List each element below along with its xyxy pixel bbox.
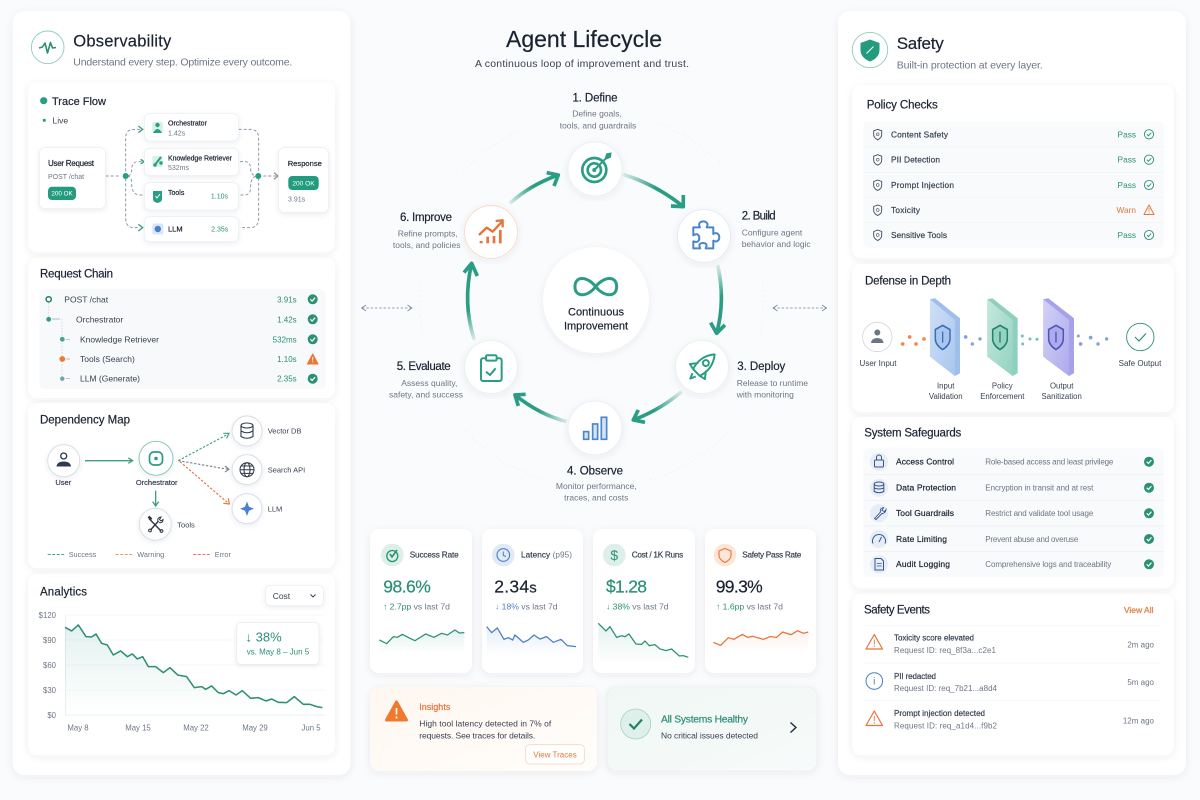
step 3: deploy bbox=[676, 340, 808, 400]
panel: dependency map bbox=[28, 403, 335, 568]
node: llm bbox=[232, 494, 282, 524]
panel: system safeguards bbox=[852, 417, 1174, 588]
arrow: left two-way bbox=[362, 305, 412, 311]
panel: analytics bbox=[28, 574, 335, 755]
node: safe output: Safe Output bbox=[1119, 359, 1162, 368]
row: prompt injection bbox=[874, 180, 1154, 190]
layer: input validation: Validation bbox=[929, 392, 963, 401]
legend bbox=[48, 550, 231, 559]
lifecycle diagram bbox=[389, 93, 811, 503]
panel: insights bbox=[370, 687, 597, 771]
step 2: build: behavior and logic bbox=[742, 239, 811, 249]
node: user input bbox=[860, 322, 897, 368]
row: audit logging: Audit Logging bbox=[896, 559, 950, 569]
node: user input: User Input bbox=[860, 359, 897, 368]
step 3: deploy: Release to runtime bbox=[737, 378, 808, 388]
kpi: latency: 2.34s bbox=[494, 577, 537, 597]
step 1: define: Define goals, bbox=[572, 109, 622, 119]
step 5: evaluate: safety, and success bbox=[389, 390, 463, 400]
layer: output sanitization bbox=[1042, 298, 1082, 401]
step 6: improve bbox=[393, 206, 518, 258]
heading: observability: Observability bbox=[73, 33, 172, 51]
node: response: 200 OK bbox=[292, 180, 315, 188]
dropdown: cost bbox=[266, 586, 323, 606]
row: tool guardrails: Restrict and validate tool usage bbox=[985, 509, 1094, 518]
legend: Error bbox=[215, 550, 231, 559]
kpi: success rate: ↑ 2.7pp vs last 7d bbox=[383, 602, 450, 612]
node: tools bbox=[144, 183, 239, 210]
kpi: cost per 1k runs: $ bbox=[610, 547, 618, 563]
icon: warning bbox=[386, 702, 406, 720]
heading: analytics: Analytics bbox=[40, 586, 87, 598]
kpi: cost per 1k runs: ↓ 38% vs last 7d bbox=[606, 602, 669, 612]
legend: Warning bbox=[137, 550, 164, 559]
node: orchestrator bbox=[136, 441, 178, 487]
row: access control bbox=[870, 453, 1154, 471]
line chart: cost: May 15 bbox=[125, 724, 151, 732]
node: user: User bbox=[55, 478, 72, 487]
node: llm: LLM bbox=[268, 504, 282, 513]
panel: safety bbox=[838, 11, 1186, 775]
row: post chat: 3.91s bbox=[277, 295, 297, 304]
step 3: deploy: 3. Deploy bbox=[737, 361, 786, 373]
line chart: cost: May 8 bbox=[67, 724, 89, 732]
row: tools search bbox=[59, 354, 318, 364]
event: pii redacted: i bbox=[873, 676, 875, 688]
heading: trace flow: Trace Flow bbox=[52, 96, 106, 108]
step 3: deploy: with monitoring bbox=[736, 390, 794, 400]
heading: safety events: Safety Events bbox=[864, 604, 930, 616]
kpi: success rate: Success Rate bbox=[410, 550, 459, 560]
step 6: improve: Refine prompts, bbox=[398, 229, 458, 239]
step 2: build: Configure agent bbox=[742, 227, 803, 237]
panel: all systems healthy: All Systems Healthy bbox=[661, 715, 749, 726]
trace arrows and nodes bbox=[123, 126, 278, 231]
layer: policy enforcement: Policy bbox=[992, 381, 1013, 390]
legend: Success bbox=[69, 550, 97, 559]
row: content safety bbox=[874, 129, 1154, 140]
subtitle: observability: Understand every step. Optimize every outcome. bbox=[73, 57, 292, 69]
node: response bbox=[279, 148, 328, 213]
node: response: Response bbox=[288, 159, 322, 168]
heading: safety: Safety bbox=[897, 34, 944, 53]
center hub: continuous improvement bbox=[543, 247, 649, 353]
event: prompt injection detected: Request ID: req_a1d4...f9b2 bbox=[894, 721, 998, 730]
row: content safety: Pass bbox=[1118, 129, 1136, 139]
node: knowledge retriever: 532ms bbox=[168, 165, 190, 172]
button: view traces bbox=[526, 745, 584, 764]
row: rate limiting: Prevent abuse and overuse bbox=[985, 535, 1079, 544]
event: pii redacted: 5m ago bbox=[1127, 678, 1155, 687]
icon: healthy check bbox=[621, 709, 651, 739]
live indicator bbox=[43, 115, 68, 125]
checks table bbox=[863, 122, 1164, 248]
node: safe output bbox=[1119, 323, 1162, 368]
panel: all systems healthy: No critical issues detected bbox=[661, 731, 758, 741]
chain table bbox=[39, 289, 326, 389]
step 4: observe: traces, and costs bbox=[564, 493, 628, 503]
event: prompt injection detected: Prompt injection detected bbox=[894, 709, 985, 718]
kpi: success rate: 98.6% bbox=[383, 577, 431, 597]
line chart: cost bbox=[39, 611, 325, 732]
heading: request chain: Request Chain bbox=[40, 269, 113, 281]
heading: dependency map: Dependency Map bbox=[40, 414, 130, 426]
icon: chevron bbox=[790, 722, 796, 732]
heading: policy checks: Policy Checks bbox=[867, 99, 938, 111]
layer: input validation: Input bbox=[937, 381, 955, 390]
line chart: cost: $60 bbox=[43, 661, 57, 670]
step 4: observe: Monitor performance, bbox=[556, 481, 637, 491]
node: user request: 200 OK bbox=[51, 191, 73, 198]
row: knowledge retriever: 532ms bbox=[273, 335, 297, 344]
layer: input validation bbox=[929, 298, 963, 401]
panel: trace flow bbox=[28, 82, 335, 252]
row: post chat bbox=[46, 294, 318, 304]
row: data protection bbox=[870, 479, 1154, 497]
event: toxicity score elevated: Request ID: req_8f3a...c2e1 bbox=[894, 646, 997, 655]
node: user bbox=[48, 445, 80, 487]
center hub: continuous improvement: Continuous bbox=[568, 307, 624, 319]
panel: policy checks bbox=[852, 85, 1174, 258]
row: tool guardrails bbox=[870, 504, 1154, 522]
layer dots bbox=[901, 334, 1108, 346]
panel: observability bbox=[12, 11, 350, 775]
heading: defense in depth: Defense in Depth bbox=[865, 276, 951, 288]
callout: 38 percent: ↓ 38% bbox=[246, 629, 282, 644]
row: data protection: Encryption in transit and at rest bbox=[985, 484, 1094, 493]
event: toxicity score elevated: Toxicity score elevated bbox=[894, 634, 974, 643]
step 2: build bbox=[678, 210, 811, 262]
row: post chat: POST /chat bbox=[64, 294, 109, 304]
step 1: define: 1. Define bbox=[572, 93, 618, 105]
row: rate limiting bbox=[870, 530, 1154, 548]
event: prompt injection detected: 12m ago bbox=[1123, 716, 1155, 725]
layer: policy enforcement bbox=[980, 298, 1025, 401]
cycle arrows bbox=[464, 173, 725, 422]
kpi: safety pass rate: 99.3% bbox=[716, 577, 763, 597]
row: sensitive tools: Pass bbox=[1118, 230, 1136, 240]
node: user request: POST /chat bbox=[48, 174, 84, 181]
live indicator: Live bbox=[52, 115, 68, 125]
row: knowledge retriever bbox=[60, 334, 318, 344]
title: Agent Lifecycle bbox=[506, 26, 662, 52]
row: access control: Role-based access and least privilege bbox=[985, 458, 1114, 467]
panel: request chain bbox=[28, 258, 335, 398]
node: tools: Tools bbox=[177, 520, 195, 530]
row: toxicity: Warn bbox=[1116, 205, 1136, 215]
row: llm generate: 2.35s bbox=[277, 375, 297, 384]
row: content safety: Content Safety bbox=[891, 129, 949, 139]
node: tools bbox=[139, 508, 195, 540]
row: prompt injection: Pass bbox=[1118, 180, 1136, 190]
node: orchestrator: 1.42s bbox=[168, 130, 186, 137]
line chart: cost: $0 bbox=[47, 711, 57, 720]
row: prompt injection: Prompt Injection bbox=[891, 180, 954, 190]
row: sensitive tools bbox=[874, 230, 1154, 240]
kpi: safety pass rate: Safety Pass Rate bbox=[742, 550, 802, 560]
panel: all systems healthy bbox=[607, 687, 817, 771]
step 1: define: tools, and guardrails bbox=[560, 121, 636, 131]
row: pii detection: PII Detection bbox=[891, 155, 940, 165]
node: search api bbox=[232, 455, 305, 485]
node: tools: 1.10s bbox=[211, 194, 228, 200]
line chart: cost: $30 bbox=[43, 686, 57, 695]
line chart: cost: May 29 bbox=[242, 724, 268, 732]
node: tools: Tools bbox=[168, 190, 185, 197]
row: pii detection: Pass bbox=[1118, 155, 1136, 165]
node: user request: User Request bbox=[48, 159, 95, 168]
row: toxicity: Toxicity bbox=[891, 205, 921, 215]
row: access control: Access Control bbox=[896, 457, 954, 467]
arrow: right two-way bbox=[773, 305, 826, 311]
icon: pulse bbox=[31, 31, 64, 64]
panel: insights: High tool latency detected in 7% of bbox=[419, 719, 552, 729]
subtitle: safety: Built-in protection at every layer. bbox=[897, 59, 1043, 71]
kpi: latency: Latency (p95) bbox=[521, 550, 572, 560]
event: toxicity score elevated: 2m ago bbox=[1127, 640, 1155, 649]
step 5: evaluate: Assess quality, bbox=[401, 378, 457, 388]
row: orchestrator: Orchestrator bbox=[76, 314, 123, 324]
subtitle: A continuous loop of improvement and trust. bbox=[475, 58, 689, 70]
step 2: build: 2. Build bbox=[742, 210, 776, 222]
trace connectors bbox=[106, 129, 277, 228]
kpi: latency bbox=[482, 529, 583, 673]
line chart: cost: May 22 bbox=[183, 724, 209, 732]
layer: output sanitization: Sanitization bbox=[1042, 392, 1082, 401]
line chart: cost: Jun 5 bbox=[301, 724, 321, 732]
safeguards table bbox=[863, 448, 1164, 577]
layer: output sanitization: Output bbox=[1050, 381, 1074, 390]
node: response: 3.91s bbox=[288, 197, 306, 204]
kpi: safety pass rate: ↑ 1.6pp vs last 7d bbox=[716, 602, 783, 612]
row: audit logging: Comprehensive logs and traceability bbox=[985, 560, 1111, 569]
node: llm bbox=[144, 217, 239, 242]
row: pii detection bbox=[874, 155, 1154, 165]
kpi: success rate bbox=[370, 529, 472, 673]
step 1: define bbox=[560, 93, 636, 196]
step 6: improve: 6. Improve bbox=[400, 212, 452, 224]
panel: insights: requests. See traces for details. bbox=[419, 730, 535, 740]
row: tools search: Tools (Search) bbox=[80, 354, 135, 364]
node: user request bbox=[39, 148, 106, 209]
decorative outer ring bbox=[419, 122, 764, 480]
row: llm generate: LLM (Generate) bbox=[80, 374, 140, 384]
row: tools search: 1.10s bbox=[277, 355, 297, 364]
node: llm: LLM bbox=[168, 224, 183, 234]
line chart: cost: $120 bbox=[39, 611, 57, 620]
node: orchestrator: Orchestrator bbox=[136, 478, 178, 487]
event: pii redacted bbox=[866, 672, 1155, 693]
step 4: observe: 4. Observe bbox=[567, 465, 623, 477]
event: prompt injection detected bbox=[866, 709, 1155, 730]
event: toxicity score elevated bbox=[866, 634, 1155, 655]
row: audit logging bbox=[870, 555, 1154, 573]
row: llm generate bbox=[60, 374, 318, 384]
kpi: cost per 1k runs: $1.28 bbox=[606, 577, 647, 597]
row: orchestrator bbox=[46, 314, 318, 324]
step 5: evaluate bbox=[389, 340, 518, 400]
button: view traces: View Traces bbox=[533, 750, 577, 760]
node: search api: Search API bbox=[268, 465, 305, 474]
event: pii redacted: Request ID: req_7b21...a8d4 bbox=[894, 684, 998, 693]
panel: insights: Insights bbox=[419, 702, 451, 712]
kpi: safety pass rate bbox=[705, 529, 816, 673]
kpi: cost per 1k runs: Cost / 1K Runs bbox=[632, 550, 683, 560]
callout: 38 percent: vs. May 8 – Jun 5 bbox=[247, 647, 310, 656]
kpi: cost per 1k runs bbox=[593, 529, 695, 673]
dependency arrows bbox=[85, 433, 229, 506]
center hub: continuous improvement: Improvement bbox=[564, 321, 628, 333]
icon: shield bbox=[852, 32, 888, 68]
layer: policy enforcement: Enforcement bbox=[980, 392, 1025, 401]
row: knowledge retriever: Knowledge Retriever bbox=[80, 334, 159, 344]
node: orchestrator bbox=[144, 114, 239, 141]
step 5: evaluate: 5. Evaluate bbox=[397, 361, 451, 373]
line chart: cost: $90 bbox=[43, 636, 57, 645]
dropdown: cost: Cost bbox=[273, 591, 291, 601]
row: toxicity bbox=[874, 205, 1154, 216]
row: rate limiting: Rate Limiting bbox=[896, 534, 947, 544]
event: pii redacted: PII redacted bbox=[894, 672, 936, 681]
row: orchestrator: 1.42s bbox=[277, 315, 297, 324]
link: view all: View All bbox=[1124, 605, 1154, 615]
heading: system safeguards: System Safeguards bbox=[864, 428, 962, 440]
node: knowledge retriever bbox=[144, 148, 239, 176]
panel: safety events bbox=[852, 594, 1174, 755]
row: tool guardrails: Tool Guardrails bbox=[896, 508, 954, 518]
node: llm: 2.35s bbox=[211, 226, 229, 234]
callout: 38 percent bbox=[237, 623, 319, 664]
node: knowledge retriever: Knowledge Retriever bbox=[168, 156, 233, 162]
row: data protection: Data Protection bbox=[896, 483, 956, 493]
node: vector db: Vector DB bbox=[268, 426, 301, 436]
node: orchestrator: Orchestrator bbox=[168, 120, 208, 128]
row: sensitive tools: Sensitive Tools bbox=[891, 230, 947, 240]
panel: defense in depth bbox=[852, 264, 1174, 412]
kpi: latency: ↓ 18% vs last 7d bbox=[495, 602, 558, 612]
node: vector db bbox=[232, 416, 301, 446]
step 6: improve: tools, and policies bbox=[393, 240, 460, 250]
step 4: observe bbox=[556, 401, 637, 503]
